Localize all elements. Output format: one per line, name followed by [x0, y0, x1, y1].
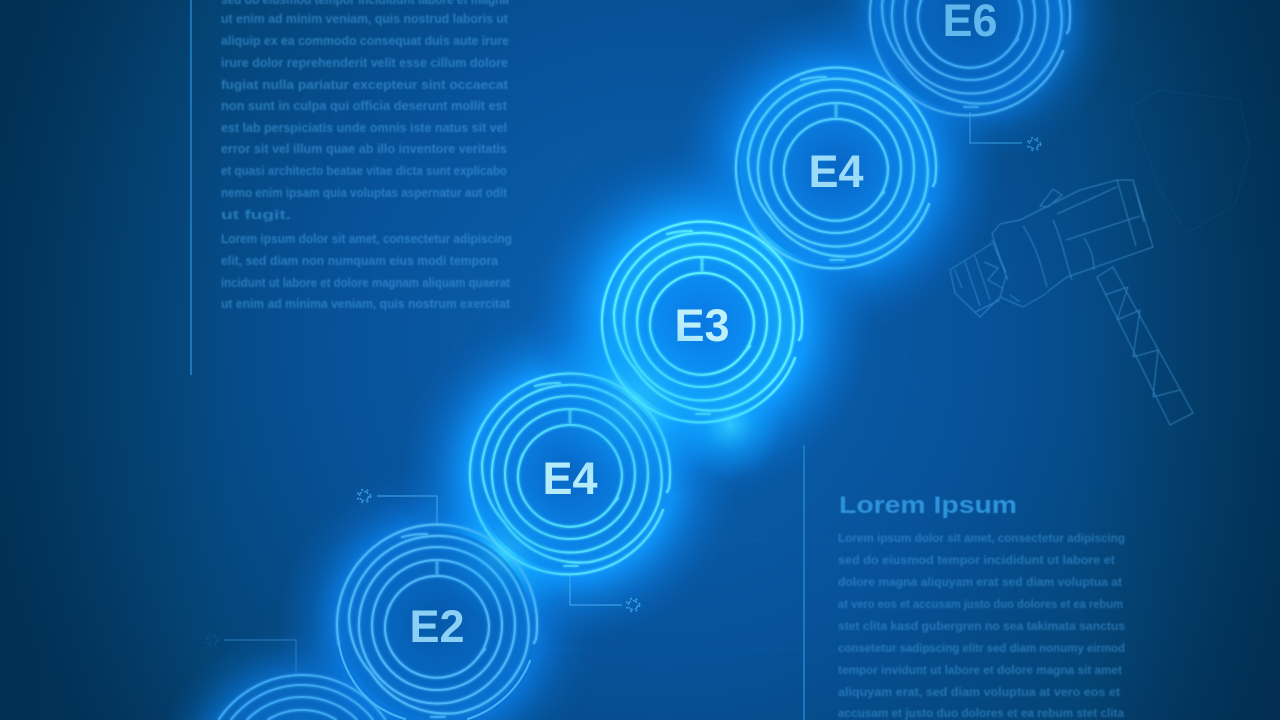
callout: E1 connector: [206, 634, 296, 675]
panel: left text column: [190, 0, 512, 375]
text block: left paragraph: ut fugit.: [221, 207, 291, 222]
text block: right paragraph: [838, 531, 1125, 720]
text block: left paragraph: incidunt ut labore et dolore magnam aliquam quaerat: [221, 275, 511, 290]
satellite body: [1020, 180, 1153, 292]
heading: Lorem Ipsum: Lorem Ipsum: [839, 492, 1017, 519]
step E4 upper: E4: [808, 146, 864, 197]
callout: E6 connector: [970, 112, 1040, 150]
callout: E2 connector: [358, 490, 437, 525]
text block: left paragraph: et quasi architecto beatae vitae dicta sunt explicabo: [221, 163, 507, 178]
step E4 lower: [470, 374, 670, 574]
step E4 upper: [736, 68, 936, 268]
text block: right paragraph: aliquyam erat, sed diam voluptua at vero eos et: [838, 685, 1120, 699]
text block: right paragraph: at vero eos et accusam justo duo dolores et ea rebum: [838, 597, 1123, 611]
text block: right paragraph: accusam et justo duo dolores et ea rebum stet clita: [838, 706, 1124, 720]
callout: E4 lower connector: [570, 572, 640, 612]
step E3: E3: [674, 300, 730, 351]
text block: left paragraph: aliquip ex ea commodo consequat duis aute irure: [221, 33, 509, 48]
panel: right text column: [803, 445, 1125, 720]
text block: left paragraph: [221, 0, 512, 311]
text block: left paragraph: non sunt in culpa qui officia deserunt mollit est: [221, 98, 508, 113]
text block: left paragraph: irure dolor reprehenderit velit esse cillum dolore: [221, 55, 508, 70]
text block: right paragraph: stet clita kasd gubergren no sea takimata sanctus: [838, 619, 1125, 633]
step E3: [602, 222, 802, 422]
text block: left paragraph: Lorem ipsum dolor sit amet, consectetur adipiscing: [221, 231, 512, 246]
satellite nozzle: [950, 220, 1047, 317]
text block: right paragraph: tempor invidunt ut labore et dolore magna sit amet: [838, 663, 1122, 677]
text block: left paragraph: elit, sed diam non numquam eius modi tempora: [221, 253, 499, 268]
step E6: [870, 0, 1070, 115]
text block: right paragraph: sed do eiusmod tempor incididunt ut labore et: [838, 553, 1115, 567]
illustration: faint solar panel: [1130, 90, 1250, 233]
step E4 lower: E4: [542, 453, 598, 504]
illustration: satellite blueprint: [950, 180, 1193, 425]
faint background geometry: [370, 120, 1120, 650]
text block: left paragraph: nemo enim ipsam quia voluptas aspernatur aut odit: [221, 185, 508, 200]
text block: left paragraph: est lab perspiciatis unde omnis iste natus sit vel: [221, 120, 507, 135]
text block: left paragraph: ut enim ad minima veniam, quis nostrum exercitat: [221, 296, 511, 311]
step E2: E2: [409, 601, 465, 652]
step E1 rings (cropped): [218, 675, 386, 720]
divider line: left: [190, 0, 192, 375]
divider line: right: [803, 445, 805, 720]
text block: left paragraph: fugiat nulla pariatur excepteur sint occaecat: [221, 77, 509, 92]
satellite truss arm: [1097, 267, 1193, 425]
step E2: [337, 525, 537, 719]
text block: left paragraph: error sit vel illum quae ab illo inventore veritatis: [221, 141, 507, 156]
text block: right paragraph: dolore magna aliquyam erat sed diam voluptua at: [838, 575, 1122, 589]
text block: left paragraph: ut enim ad minim veniam, quis nostrud laboris ut: [221, 11, 509, 26]
text block: right paragraph: consetetur sadipscing elitr sed diam nonumy eirmod: [838, 641, 1125, 655]
text block: right paragraph: Lorem ipsum dolor sit amet, consectetur adipiscing: [838, 531, 1125, 545]
